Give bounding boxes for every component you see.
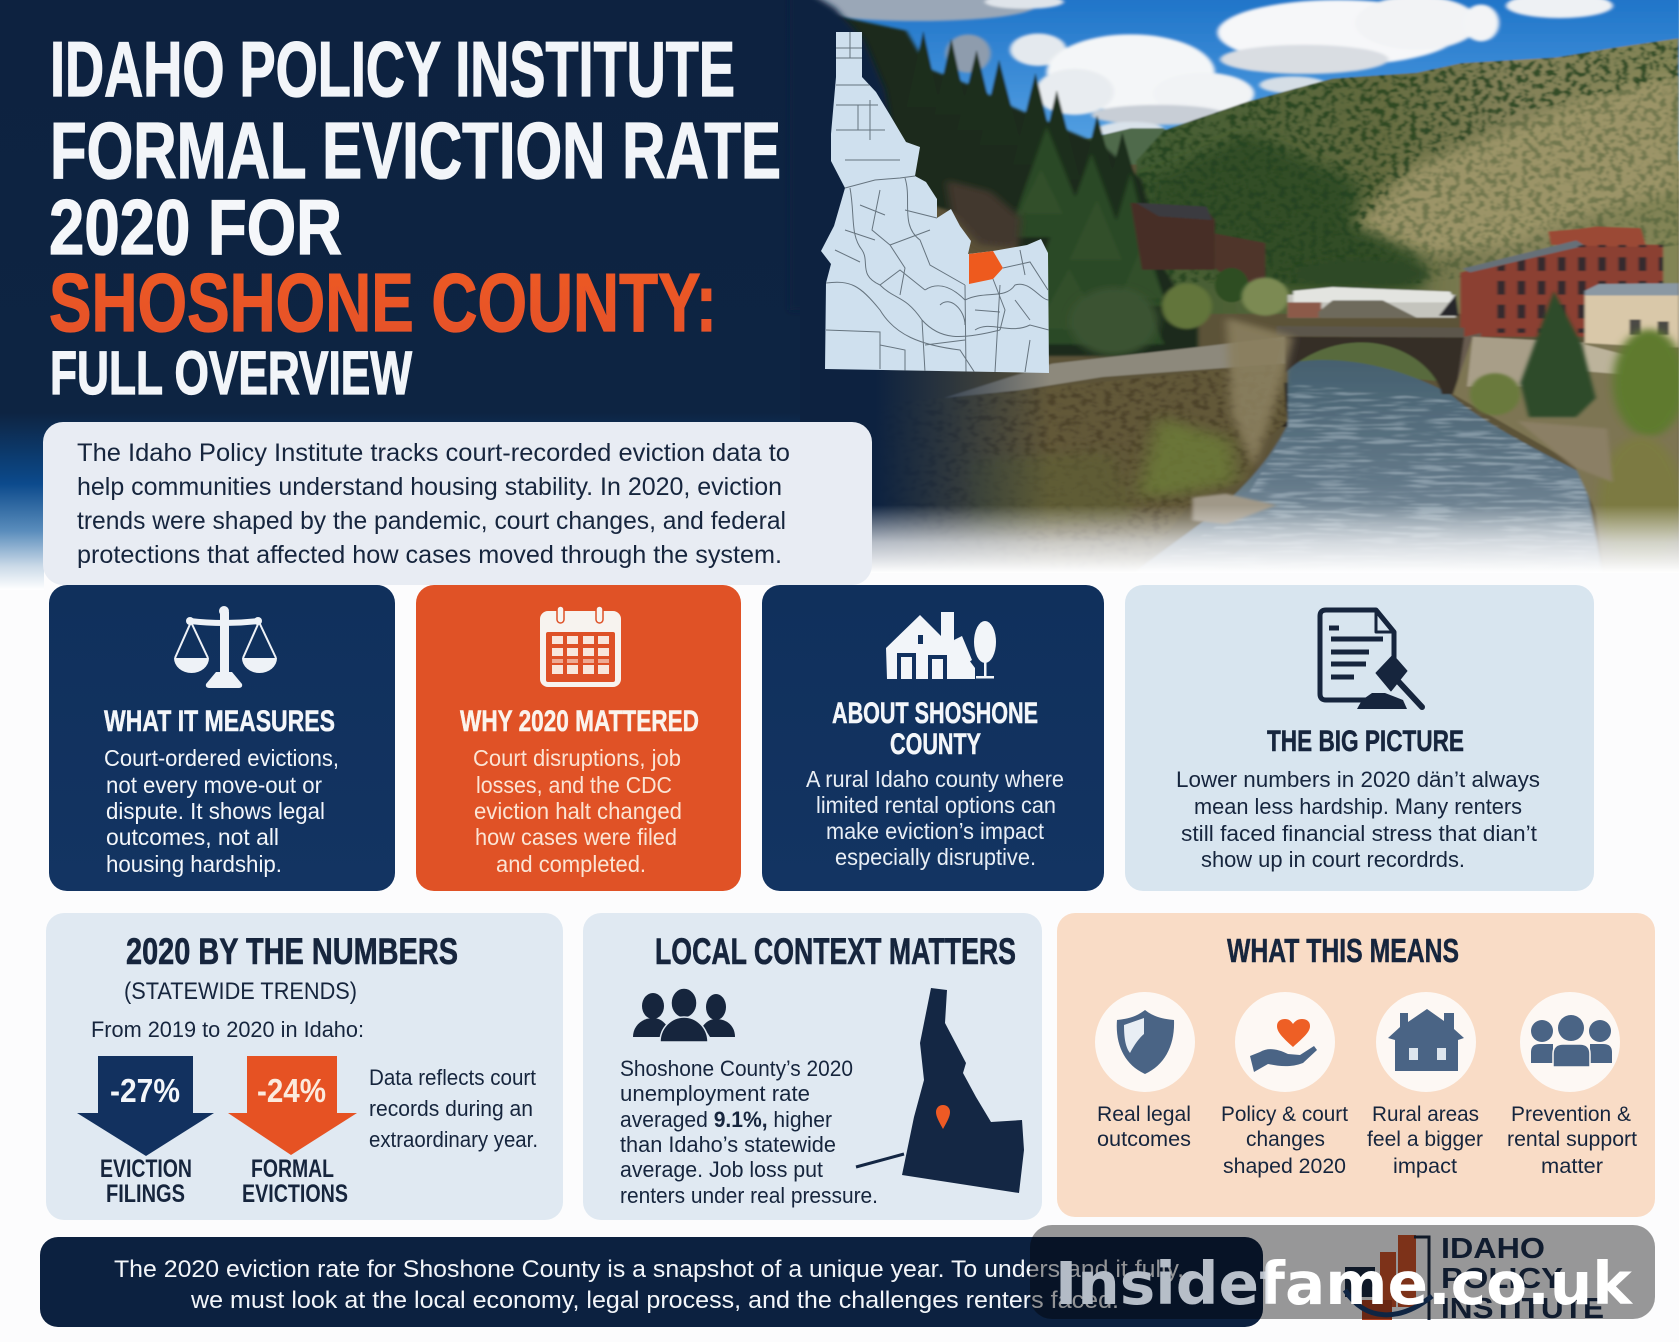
Idaho county map: [821, 32, 1049, 373]
heading: WHAT THIS MEANS: [1227, 932, 1459, 969]
side note: [369, 1065, 538, 1152]
heading: 2020 BY THE NUMBERS: [126, 931, 458, 972]
body text: [620, 1056, 878, 1208]
body text: make eviction’s impact: [826, 818, 1045, 844]
body text: show up in court recordrds.: [1201, 847, 1465, 872]
navy edge over the forest: [790, 0, 908, 310]
icon: calendar: [540, 606, 621, 687]
distant ridge: [1084, 127, 1167, 165]
red brick mill building: [1460, 243, 1663, 337]
label: formal evictions: [242, 1155, 348, 1208]
item: policy and court changes: shaped 2020: [1223, 1154, 1346, 1178]
road and foreground brush: [932, 337, 1285, 402]
icon: document and gavel: [1320, 610, 1422, 709]
heading: WHAT IT MEASURES: [104, 705, 335, 738]
body text: limited rental options can: [816, 792, 1056, 818]
body text: mean less hardship. Many renters: [1194, 794, 1522, 819]
heading: WHY 2020 MATTERED: [460, 705, 699, 738]
body text: Court disruptions, job: [473, 745, 681, 771]
item: prevention and rental support: matter: [1541, 1154, 1603, 1178]
watermark backing box: [1030, 1225, 1655, 1319]
navy fade over foreground: [800, 300, 1050, 590]
body text: renters under real pressure.: [620, 1183, 878, 1208]
item: policy and court changes: [1221, 992, 1348, 1178]
footer banner: we must look at the local economy, legal process, and the challenges renters faced.: [190, 1287, 1119, 1314]
body text: Shoshone County’s 2020: [620, 1056, 853, 1081]
footer banner: The 2020 eviction rate for Shoshone County is a snapshot of a unique year. To understand it fully,: [114, 1256, 1184, 1283]
lead-in text: From 2019 to 2020 in Idaho:: [91, 1017, 364, 1042]
intro text box: [43, 422, 872, 585]
footer banner: [40, 1237, 1263, 1327]
label: formal evictions: FORMAL: [251, 1155, 334, 1183]
watermark text: Insidefame.co.uk: [1055, 1249, 1634, 1318]
right bank: [1452, 342, 1679, 541]
arrow: eviction filings -27%: -27%: [110, 1072, 180, 1109]
body text: averaged 9.1%, higher: [620, 1107, 832, 1132]
logo: Idaho Policy Institute: IDAHO: [1441, 1233, 1545, 1265]
title: SHOSHONE COUNTY:: [49, 256, 717, 349]
body text: unemployment rate: [620, 1081, 810, 1106]
title: IDAHO POLICY INSTITUTE: [50, 25, 735, 113]
body text: housing hardship.: [106, 851, 282, 877]
icon: people: [633, 988, 735, 1042]
item: rural areas impact: feel a bigger: [1367, 1127, 1483, 1151]
intro text box: trends were shaped by the pandemic, court changes, and federal: [77, 507, 786, 535]
item: rural areas impact: [1367, 992, 1483, 1178]
item: policy and court changes: Policy & court: [1221, 1102, 1348, 1126]
icon: scales of justice: [174, 606, 277, 688]
card: about Shoshone County: [762, 585, 1104, 891]
icon: house and tree: [886, 612, 996, 679]
arrow: formal evictions -24%: [228, 1056, 357, 1155]
body text: Lower numbers in 2020 dän’t always: [1176, 767, 1540, 792]
item: real legal outcomes: Real legal: [1097, 1102, 1191, 1126]
item: prevention and rental support: Prevention &: [1511, 1102, 1631, 1126]
logo: Idaho Policy Institute: INSTITUTE: [1441, 1293, 1604, 1325]
side note: Data reflects court: [369, 1065, 536, 1090]
panel: 2020 by the numbers: [46, 913, 563, 1220]
side note: records during an: [369, 1096, 533, 1121]
Idaho silhouette with pin: [856, 988, 1024, 1193]
subheading: (STATEWIDE TRENDS): [124, 978, 357, 1005]
logo: Idaho Policy Institute: POLICY: [1441, 1263, 1563, 1295]
label: formal evictions: EVICTIONS: [242, 1180, 348, 1208]
body text: A rural Idaho county where: [806, 766, 1064, 792]
arrow: formal evictions -24%: -24%: [257, 1072, 326, 1109]
item: policy and court changes: changes: [1246, 1127, 1325, 1151]
body text: not every move-out or: [106, 772, 322, 798]
title: FORMAL EVICTION RATE: [50, 106, 781, 195]
trees mid-ground: [1215, 268, 1248, 302]
dark forest on left: [834, 15, 1198, 356]
body text: outcomes, not all: [106, 824, 279, 850]
body text: dispute. It shows legal: [106, 798, 325, 824]
side note: extraordinary year.: [369, 1127, 538, 1152]
heading: THE BIG PICTURE: [1267, 725, 1464, 758]
panel: what this means: [1057, 913, 1655, 1217]
card: why 2020 mattered: [416, 585, 741, 891]
bank behind the bridge: [1300, 342, 1436, 381]
title: 2020 FOR: [49, 183, 342, 271]
arched bridge: [1265, 326, 1481, 427]
body text: [806, 766, 1064, 870]
body text: how cases were filed: [475, 824, 677, 850]
logo: Idaho Policy Institute: [1345, 1233, 1604, 1325]
body text: Court-ordered evictions,: [104, 745, 339, 771]
card: what it measures: [49, 585, 395, 891]
body text: losses, and the CDC: [476, 772, 672, 798]
heading: LOCAL CONTEXT MATTERS: [655, 931, 1016, 972]
body text: [473, 745, 682, 877]
body text: than Idaho’s statewide: [620, 1132, 836, 1157]
Shoshone county highlight: [969, 251, 1003, 284]
item: rural areas impact: Rural areas: [1372, 1102, 1479, 1126]
photo fade to white: [44, 505, 1679, 573]
item: prevention and rental support: [1507, 992, 1637, 1178]
card: about Shoshone County: COUNTY: [890, 728, 981, 761]
heading: ABOUT SHOSHONE: [832, 697, 1038, 730]
body text: average. Job loss put: [620, 1157, 824, 1182]
card: the big picture: [1125, 585, 1594, 891]
item: real legal outcomes: [1095, 992, 1195, 1151]
item: rural areas impact: impact: [1393, 1154, 1457, 1178]
title: FULL OVERVIEW: [50, 339, 412, 407]
title: [49, 25, 781, 407]
main mountainside: [1136, 38, 1679, 314]
label: eviction filings: [100, 1155, 192, 1208]
panel: local context matters: [583, 913, 1042, 1220]
body text: [1176, 767, 1540, 872]
label: eviction filings: FILINGS: [106, 1180, 185, 1208]
label: eviction filings: EVICTION: [100, 1155, 192, 1183]
far white shed with truss: [1288, 295, 1456, 318]
arrow: eviction filings -27%: [77, 1056, 214, 1156]
intro text box: The Idaho Policy Institute tracks court-recorded eviction data to: [77, 439, 790, 467]
dark brown hotel building: [1131, 203, 1215, 270]
intro text box: help communities understand housing stability. In 2020, eviction: [77, 473, 782, 501]
hero photo: river town in mountains: [794, 0, 1679, 605]
body text: eviction halt changed: [474, 798, 682, 824]
clouds: [800, 0, 1613, 139]
item: real legal outcomes: outcomes: [1097, 1127, 1191, 1151]
navy header background: [0, 0, 800, 590]
cream building: [1585, 294, 1679, 347]
river: [1148, 359, 1600, 564]
item: prevention and rental support: rental support: [1507, 1127, 1637, 1151]
body text: and completed.: [496, 851, 646, 877]
body text: especially disruptive.: [835, 844, 1036, 870]
body text: [104, 745, 339, 877]
intro text box: protections that affected how cases moved through the system.: [77, 541, 782, 569]
body text: still faced financial stress that dian’t: [1181, 821, 1538, 846]
